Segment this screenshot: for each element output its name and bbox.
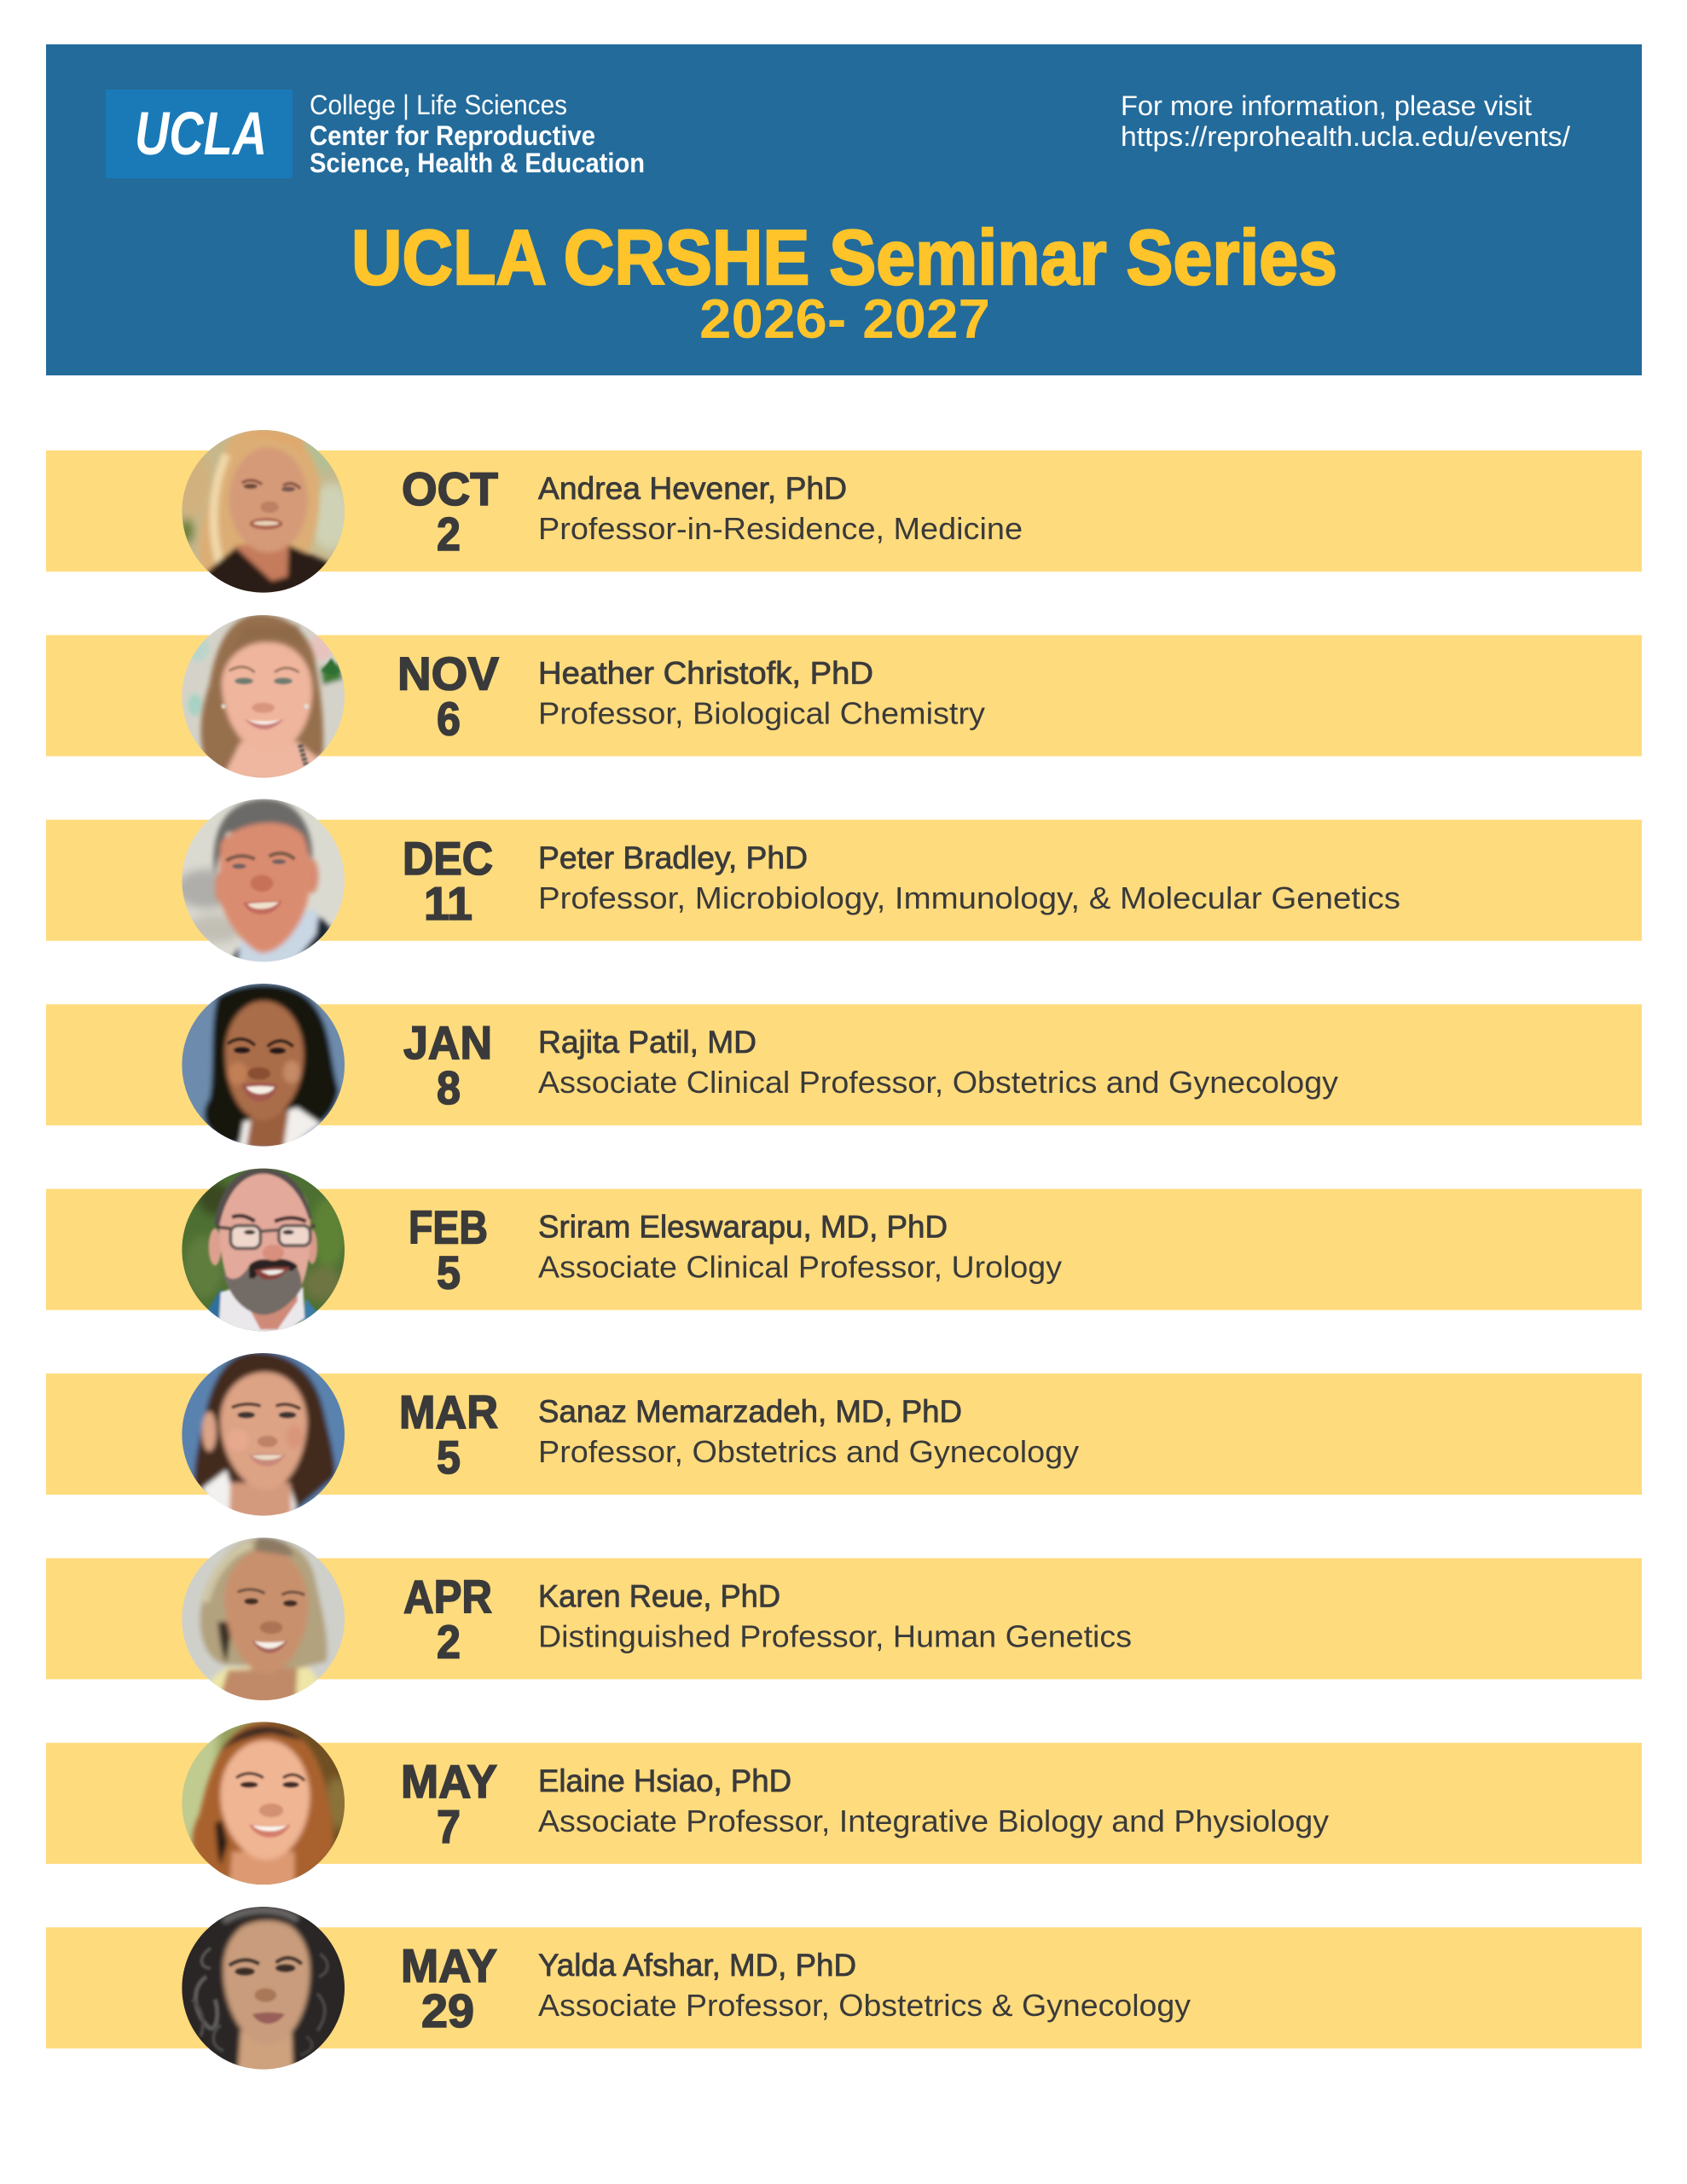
date: APR 2: APR <box>403 1570 492 1623</box>
logo: UCLA box: UCLA <box>135 101 267 168</box>
panel: seminar row May 29 <box>46 1907 1642 2070</box>
info text line 1: For more information, please visit <box>1121 90 1532 121</box>
date: JAN 8 <box>403 1016 492 1114</box>
panel: seminar row December <box>46 799 1642 962</box>
speaker role: Associate Clinical Professor, Urology <box>538 1250 1063 1285</box>
speaker role: Associate Professor, Integrative Biology and Physiology <box>538 1804 1330 1838</box>
photo: Yalda Afshar <box>182 1907 345 2070</box>
date: MAR 5: MAR <box>399 1385 498 1438</box>
speaker name: Heather Christofk, PhD <box>538 654 873 690</box>
date: APR 2: 2 <box>437 1615 461 1668</box>
date: FEB 5 <box>409 1201 488 1299</box>
photo: Sanaz Memarzadeh <box>182 1353 345 1516</box>
date: APR 2 <box>403 1570 492 1668</box>
date: OCT 2: 2 <box>437 508 461 561</box>
speaker name: Karen Reue, PhD <box>538 1577 780 1613</box>
info text line 2: url: https://reprohealth.ucla.edu/events/ <box>1121 121 1570 152</box>
date: NOV 6 <box>397 647 499 745</box>
panel: seminar row May 7 <box>46 1722 1642 1885</box>
speaker name: Andrea Hevener, PhD <box>538 470 847 506</box>
speaker name: Peter Bradley, PhD <box>538 839 808 875</box>
date: OCT 2: OCT <box>402 462 498 515</box>
date: MAY 29 <box>401 1939 497 2037</box>
panel: header banner <box>46 44 1642 375</box>
photo: Rajita Patil <box>182 984 345 1147</box>
date: DEC 11: 11 <box>424 877 472 930</box>
speaker role: Associate Professor, Obstetrics & Gynecology <box>538 1988 1191 2023</box>
speaker role: Professor, Microbiology, Immunology, & Molecular Genetics <box>538 880 1400 915</box>
panel: seminar row January <box>46 984 1642 1147</box>
speaker role: Associate Clinical Professor, Obstetrics and Gynecology <box>538 1065 1339 1100</box>
photo: Andrea Hevener <box>182 430 345 593</box>
date: DEC 11 <box>403 832 493 930</box>
photo: Sriram Eleswarapu <box>182 1169 345 1331</box>
speaker name: Sanaz Memarzadeh, MD, PhD <box>538 1393 962 1429</box>
photo: Heather Christofk <box>182 615 345 778</box>
speaker role: Distinguished Professor, Human Genetics <box>538 1618 1132 1653</box>
speaker name: Yalda Afshar, MD, PhD <box>538 1947 856 1983</box>
subtitle: years: 2026- 2027 <box>699 288 990 350</box>
date: MAY 7 <box>401 1755 497 1853</box>
date: JAN 8: JAN <box>403 1016 492 1069</box>
photo: Elaine Hsiao <box>182 1722 345 1885</box>
panel: seminar row November <box>46 615 1642 778</box>
date: DEC 11: DEC <box>403 832 493 885</box>
speaker role: Professor-in-Residence, Medicine <box>538 511 1023 546</box>
speaker name: Rajita Patil, MD <box>538 1024 757 1060</box>
photo: Peter Bradley <box>182 799 345 962</box>
speaker role: Professor, Biological Chemistry <box>538 695 986 730</box>
panel: seminar row February <box>46 1169 1642 1331</box>
title: UCLA CRSHE Seminar Series <box>351 215 1337 301</box>
logo text: center name line 1: Center for Reproductive <box>310 120 595 151</box>
logo text: center name line 2: Science, Health & Education <box>310 148 645 178</box>
date: FEB 5: FEB <box>409 1201 488 1254</box>
photo: Karen Reue <box>182 1537 345 1700</box>
date: MAY 29: 29 <box>421 1984 474 2037</box>
panel: seminar row March <box>46 1353 1642 1516</box>
panel: seminar row April <box>46 1537 1642 1700</box>
speaker role: Professor, Obstetrics and Gynecology <box>538 1434 1080 1469</box>
date: MAR 5: 5 <box>437 1431 461 1484</box>
logo: UCLA box <box>106 90 293 178</box>
date: NOV 6: 6 <box>437 692 461 745</box>
speaker name: Sriram Eleswarapu, MD, PhD <box>538 1209 948 1245</box>
date: MAR 5 <box>399 1385 498 1484</box>
logo text: college: College | Life Sciences <box>310 90 567 120</box>
date: MAY 7: MAY <box>401 1755 497 1808</box>
date: JAN 8: 8 <box>437 1061 461 1114</box>
panel: seminar row October <box>46 430 1642 593</box>
date: MAY 7: 7 <box>437 1800 461 1853</box>
date: NOV 6: NOV <box>397 647 499 700</box>
date: FEB 5: 5 <box>437 1246 461 1299</box>
date: OCT 2 <box>402 462 498 561</box>
speaker name: Elaine Hsiao, PhD <box>538 1763 791 1798</box>
date: MAY 29: MAY <box>401 1939 497 1992</box>
